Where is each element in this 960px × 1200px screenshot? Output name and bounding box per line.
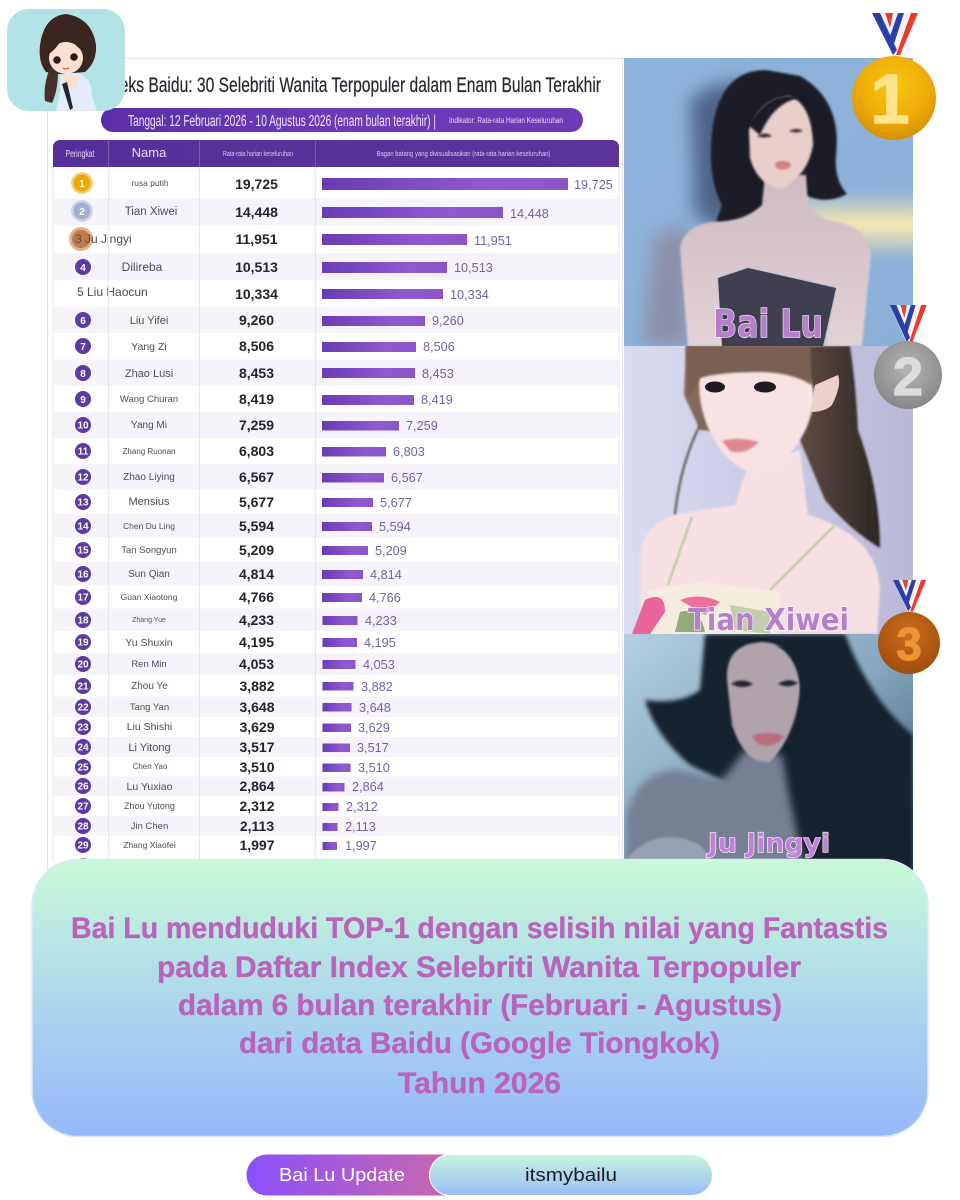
- row 7: Yang Zi: 8,506: [239, 338, 274, 354]
- row 17: Guan Xiaotong: Guan Xiaotong: [121, 592, 178, 602]
- footer tag pill: itsmybailu: [525, 1165, 617, 1185]
- medal 3 bronze: [878, 580, 940, 674]
- row 22: Tang Yan: 22: [77, 702, 89, 714]
- summary text: [71, 912, 888, 1100]
- fringe: [748, 96, 802, 135]
- ribbon: [890, 305, 927, 342]
- row 23: Liu Shishi: [54, 717, 619, 737]
- hair: [711, 70, 847, 222]
- row 29: Zhang Xiaofei: Zhang Xiaofei: [123, 840, 176, 850]
- row 11: Zhang Ruonan: [54, 438, 619, 464]
- row 14: Chen Du Ling: Chen Du Ling: [123, 521, 175, 531]
- gold rank badge: [71, 172, 93, 194]
- row 9: Wang Churan: [54, 386, 619, 412]
- row 10: Yang Mi: 7,259: [239, 417, 274, 433]
- row 14: Chen Du Ling: 5,594: [239, 518, 274, 534]
- row 17: Guan Xiaotong: 4,766: [239, 589, 274, 605]
- bronze rank badge: [69, 227, 93, 251]
- row 17: Guan Xiaotong: 4,766: [369, 591, 401, 605]
- table header: Nama: [132, 145, 167, 160]
- face: [698, 370, 814, 470]
- row 27: Zhou Yutong: 2,312: [239, 798, 275, 814]
- row 13: Mensius: Mensius: [129, 496, 170, 508]
- date range pill: Tanggal: 12 Februari 2026 - 10 Agustus 2026 (enam bulan terakhir) |: [128, 113, 436, 130]
- floral top: [634, 582, 780, 634]
- row 11: Zhang Ruonan: 6,803: [239, 443, 274, 459]
- row 4: Dilireba: 10,513: [235, 259, 278, 275]
- panel: ranking table: [48, 58, 622, 874]
- summary text: dalam 6 bulan terakhir (Februari - Agustus): [178, 989, 782, 1022]
- medal 2 silver: 2: [893, 347, 923, 407]
- row 26: Lu Yuxiao: 2,864: [239, 778, 275, 794]
- row 29: Zhang Xiaofei: 1,997: [345, 839, 377, 853]
- row 2: Tian Xiwei: [54, 198, 619, 226]
- ear: [810, 375, 839, 412]
- row 15: Tan Songyun: 15: [77, 546, 89, 556]
- row 30 peeking badge: [75, 858, 91, 874]
- face: [749, 96, 813, 189]
- row 6: Liu Yifei: 6: [80, 316, 86, 327]
- row 18: Zhang Yue: 4,233: [365, 614, 397, 628]
- hair mass: [645, 634, 913, 870]
- row 19: Yu Shuxin: 4,195: [239, 634, 274, 650]
- name label: Tian Xiwei: [688, 603, 849, 638]
- row 19: Yu Shuxin: [54, 631, 619, 653]
- row 26: Lu Yuxiao: Lu Yuxiao: [127, 781, 173, 793]
- date range pill: Indikator: Rata-rata Harian Keseluruhan: [449, 115, 563, 125]
- panel: summary callout: [32, 860, 928, 1136]
- row 9: Wang Churan: Wang Churan: [120, 394, 178, 405]
- footer tag pill: Bai Lu Update: [279, 1165, 405, 1185]
- ribbon: [893, 580, 926, 611]
- dress and arms: [56, 73, 97, 111]
- photo: Ju Jingyi: [624, 634, 913, 870]
- row 8: Zhao Lusi: [54, 360, 619, 386]
- medal 1 gold: [852, 13, 936, 140]
- row 10: Yang Mi: Yang Mi: [131, 420, 167, 431]
- left segment: [246, 1154, 450, 1196]
- back hair: [684, 346, 880, 548]
- row 15: Tan Songyun: Tan Songyun: [121, 545, 177, 556]
- row 12: Zhao Liying: 12: [77, 472, 89, 484]
- row 29: Zhang Xiaofei: [54, 836, 619, 855]
- name label: Ju Jingyi: [706, 829, 830, 859]
- row 4: Dilireba: 4: [80, 263, 86, 274]
- row 23: Liu Shishi: 3,629: [358, 721, 390, 735]
- face: [49, 42, 83, 74]
- row 19: Yu Shuxin: 4,195: [364, 636, 396, 650]
- row 6: Liu Yifei: Liu Yifei: [130, 315, 168, 327]
- row 13: Mensius: 5,677: [380, 496, 412, 510]
- row 9: Wang Churan: 9: [80, 395, 86, 406]
- row 25: Chen Yao: 25: [77, 762, 89, 774]
- row 25: Chen Yao: 3,510: [239, 759, 275, 775]
- row 26: Lu Yuxiao: [54, 776, 619, 796]
- medal 2 silver: [874, 305, 942, 409]
- medal 1 gold: 1: [871, 60, 909, 138]
- row 12: Zhao Liying: [54, 464, 619, 490]
- row 24: Li Yitong: Li Yitong: [128, 742, 171, 754]
- row 14: Chen Du Ling: 5,594: [379, 520, 411, 534]
- row 28: Jin Chen: 2,113: [240, 818, 274, 834]
- row 7: Yang Zi: Yang Zi: [131, 341, 167, 353]
- shoulder and chest: [626, 750, 805, 870]
- row 29: Zhang Xiaofei: 29: [77, 840, 89, 852]
- row 27: Zhou Yutong: 2,312: [346, 800, 378, 814]
- row 19: Yu Shuxin: 19: [77, 638, 89, 648]
- row 1: rusa putih: [54, 167, 619, 198]
- row 15: Tan Songyun: 5,209: [375, 544, 407, 558]
- row 4: Dilireba: 10,513: [454, 261, 493, 275]
- row 16: Sun Qian: 16: [77, 570, 89, 580]
- row 22: Tang Yan: Tang Yan: [130, 702, 169, 713]
- row 24: Li Yitong: 24: [77, 742, 89, 754]
- avatar: chibi girl: [7, 9, 125, 111]
- row 5: Liu Haocun: [54, 280, 619, 306]
- row 24: Li Yitong: 3,517: [239, 739, 275, 755]
- face: [727, 642, 800, 762]
- row 4: Dilireba: Dilireba: [122, 260, 163, 274]
- row 8: Zhao Lusi: Zhao Lusi: [125, 368, 173, 380]
- chart title: Indeks Baidu: 30 Selebriti Wanita Terpopuler dalam Enam Bulan Terakhir: [98, 74, 601, 97]
- row 6: Liu Yifei: 9,260: [239, 312, 274, 328]
- microphone: [62, 82, 73, 110]
- row 10: Yang Mi: 10: [77, 420, 89, 432]
- name label: Bai Lu: [713, 302, 823, 346]
- row 13: Mensius: 13: [77, 498, 89, 508]
- eyes and mouth: [705, 382, 776, 452]
- strapless dress: [718, 268, 836, 346]
- row 8: Zhao Lusi: 8: [80, 369, 86, 380]
- row 27: Zhou Yutong: 27: [77, 802, 89, 812]
- ribbon: [872, 13, 918, 55]
- row 6: Liu Yifei: 9,260: [432, 314, 464, 328]
- row 20: Ren Min: Ren Min: [131, 659, 167, 670]
- row 24: Li Yitong: [54, 737, 619, 757]
- row 5: Liu Haocun: 10,334: [235, 286, 278, 302]
- row 27: Zhou Yutong: Zhou Yutong: [124, 801, 175, 811]
- hair: [40, 14, 96, 74]
- row 16: Sun Qian: 4,814: [370, 568, 402, 582]
- row 25: Chen Yao: Chen Yao: [133, 762, 168, 771]
- row 17: Guan Xiaotong: 17: [77, 592, 89, 604]
- row 15: Tan Songyun: [54, 538, 619, 562]
- row 11: Zhang Ruonan: 11: [78, 446, 89, 458]
- row 9: Wang Churan: 8,419: [421, 393, 453, 407]
- row 21: Zhou Ye: [54, 675, 619, 696]
- row 3: Ju Jingyi: 11,951: [474, 234, 512, 248]
- row 3: Ju Jingyi: 11,951: [235, 231, 278, 247]
- table header: Rata-rata harian keseluruhan: [223, 151, 293, 158]
- row 21: Zhou Ye: 3,882: [361, 680, 393, 694]
- row 27: Zhou Yutong: [54, 796, 619, 816]
- row 18: Zhang Yue: Zhang Yue: [132, 617, 166, 624]
- row 28: Jin Chen: 28: [77, 822, 89, 832]
- row 12: Zhao Liying: Zhao Liying: [123, 472, 175, 483]
- row 1: rusa putih: 19,725: [574, 178, 613, 192]
- silver rank badge: [71, 200, 93, 222]
- row 2: Tian Xiwei: 14,448: [510, 207, 549, 221]
- date range pill: [101, 108, 583, 132]
- summary text: Bai Lu menduduki TOP-1 dengan selisih nilai yang Fantastis: [71, 912, 888, 945]
- row 28: Jin Chen: [54, 816, 619, 836]
- row 1: rusa putih: 19,725: [235, 176, 278, 192]
- row 21: Zhou Ye: Zhou Ye: [131, 681, 168, 692]
- row 23: Liu Shishi: 3,629: [239, 719, 275, 735]
- row 18: Zhang Yue: [54, 608, 619, 631]
- row 5: Liu Haocun: 5 Liu Haocun: [77, 285, 148, 299]
- row 29: Zhang Xiaofei: 1,997: [239, 837, 275, 853]
- row 5: Liu Haocun: 10,334: [450, 288, 489, 302]
- right segment: [430, 1154, 712, 1196]
- row 9: Wang Churan: 8,419: [239, 391, 274, 407]
- summary text: Tahun 2026: [398, 1067, 561, 1100]
- row 18: Zhang Yue: 18: [77, 616, 89, 626]
- row 21: Zhou Ye: 21: [77, 682, 89, 692]
- shoulders and chest: [640, 450, 880, 634]
- row 11: Zhang Ruonan: 6,803: [393, 445, 425, 459]
- footer tag pill: [246, 1154, 712, 1196]
- row 16: Sun Qian: 4,814: [239, 566, 274, 582]
- row 25: Chen Yao: 3,510: [358, 761, 390, 775]
- row 7: Yang Zi: 7: [80, 342, 86, 353]
- gold rank badge: 1: [79, 179, 85, 190]
- row 18: Zhang Yue: 4,233: [239, 612, 274, 628]
- shoulders and arms: [680, 175, 871, 346]
- row 2: Tian Xiwei: Tian Xiwei: [125, 206, 177, 218]
- row 14: Chen Du Ling: 14: [77, 522, 89, 532]
- summary text: pada Daftar Index Selebriti Wanita Terpopuler: [157, 951, 801, 984]
- row 22: Tang Yan: 3,648: [359, 701, 391, 715]
- row 20: Ren Min: 4,053: [239, 656, 274, 672]
- row 22: Tang Yan: [54, 696, 619, 717]
- row 23: Liu Shishi: 23: [77, 722, 89, 734]
- row 11: Zhang Ruonan: Zhang Ruonan: [123, 447, 175, 456]
- eyes nose mouth: [757, 129, 803, 170]
- row 14: Chen Du Ling: [54, 514, 619, 538]
- row 16: Sun Qian: [54, 562, 619, 586]
- row 26: Lu Yuxiao: 26: [77, 782, 89, 792]
- row 12: Zhao Liying: 6,567: [391, 471, 423, 485]
- row 4: Dilireba: [54, 253, 619, 280]
- summary text: dari data Baidu (Google Tiongkok): [239, 1027, 720, 1060]
- row 20: Ren Min: [54, 653, 619, 675]
- row 28: Jin Chen: Jin Chen: [131, 821, 168, 832]
- row 20: Ren Min: 4,053: [363, 658, 395, 672]
- row 13: Mensius: 5,677: [239, 494, 274, 510]
- row 26: Lu Yuxiao: 2,864: [352, 780, 384, 794]
- row 21: Zhou Ye: 3,882: [239, 678, 275, 694]
- photo: Tian Xiwei: [624, 346, 913, 638]
- row 24: Li Yitong: 3,517: [357, 741, 389, 755]
- row 20: Ren Min: 20: [77, 660, 89, 670]
- row 1: rusa putih: rusa putih: [131, 178, 169, 188]
- row 25: Chen Yao: [54, 757, 619, 776]
- row 28: Jin Chen: 2,113: [345, 820, 376, 834]
- row 7: Yang Zi: [54, 333, 619, 360]
- photo: Bai Lu: [624, 58, 920, 346]
- water sparkle: [628, 836, 712, 859]
- row 19: Yu Shuxin: Yu Shuxin: [125, 637, 173, 649]
- table header: [53, 140, 619, 167]
- row 13: Mensius: [54, 490, 619, 514]
- fringe: [686, 346, 812, 400]
- row 17: Guan Xiaotong: [54, 586, 619, 608]
- row 6: Liu Yifei: [54, 306, 619, 333]
- braid: [45, 68, 58, 103]
- eyes and mouth: [731, 680, 798, 745]
- row 23: Liu Shishi: Liu Shishi: [127, 721, 172, 733]
- row 3: Ju Jingyi: 3 Ju Jingyi: [75, 232, 132, 246]
- row 10: Yang Mi: 7,259: [406, 419, 438, 433]
- row 10: Yang Mi: [54, 412, 619, 438]
- table header: Bagan batang yang divisualisasikan (rata-rata harian keseluruhan): [376, 149, 551, 158]
- row 12: Zhao Liying: 6,567: [239, 469, 274, 485]
- row 2: Tian Xiwei: 14,448: [235, 204, 278, 220]
- row 16: Sun Qian: Sun Qian: [128, 569, 170, 580]
- eyes and mouth: [53, 56, 61, 64]
- row 3: Ju Jingyi: [54, 226, 619, 253]
- row 15: Tan Songyun: 5,209: [239, 542, 274, 558]
- row 7: Yang Zi: 8,506: [423, 340, 455, 354]
- row 8: Zhao Lusi: 8,453: [422, 367, 454, 381]
- silver rank badge: 2: [79, 207, 85, 218]
- row 8: Zhao Lusi: 8,453: [239, 365, 274, 381]
- row 22: Tang Yan: 3,648: [239, 699, 275, 715]
- table header: Peringkat: [66, 149, 95, 160]
- medal 3 bronze: 3: [896, 618, 922, 670]
